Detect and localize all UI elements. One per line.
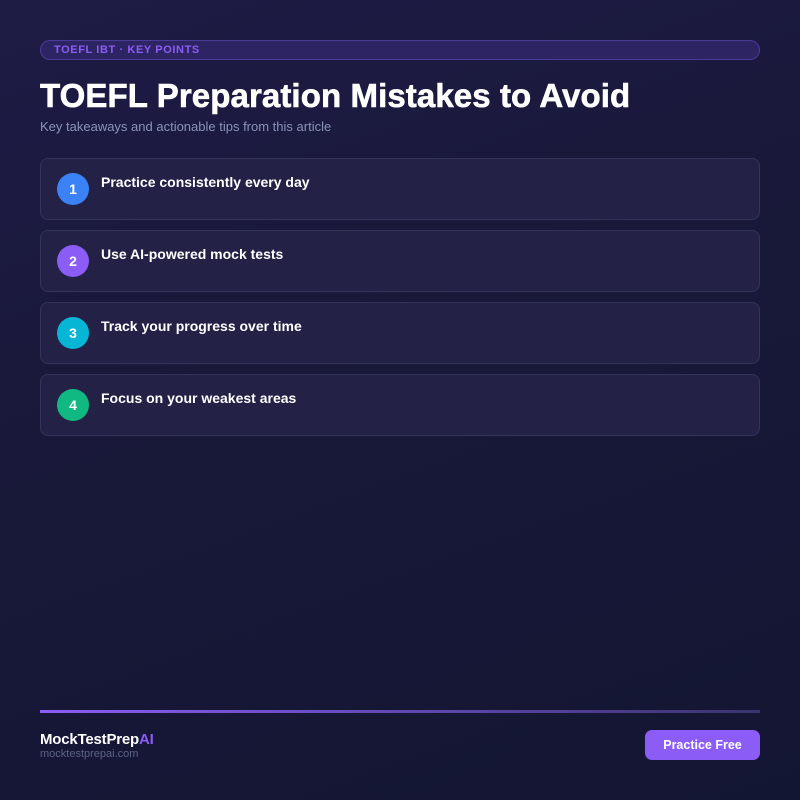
card 3: Track your progress over time <box>101 318 302 334</box>
card 1: 1 <box>69 181 77 197</box>
footer bar <box>40 710 760 713</box>
brand: MockTestPrepAI <box>40 731 154 748</box>
button <box>645 730 760 760</box>
url: mocktestprepai.com <box>40 748 138 760</box>
card 2: 2 <box>69 253 77 269</box>
category pill: TOEFL IBT · KEY POINTS <box>54 44 200 56</box>
card 2 <box>40 230 760 292</box>
card 1: Practice consistently every day <box>101 174 310 190</box>
card 3: 3 <box>69 325 77 341</box>
card 4: 4 <box>69 397 77 413</box>
card 4 <box>40 374 760 436</box>
button: Practice Free <box>663 738 742 752</box>
subtitle: Key takeaways and actionable tips from this article <box>40 119 331 134</box>
category pill <box>40 40 760 60</box>
card 1 <box>40 158 760 220</box>
card 3 <box>40 302 760 364</box>
title: TOEFL Preparation Mistakes to Avoid <box>40 77 630 114</box>
card 4: Focus on your weakest areas <box>101 390 296 406</box>
card 2: Use AI-powered mock tests <box>101 246 283 262</box>
